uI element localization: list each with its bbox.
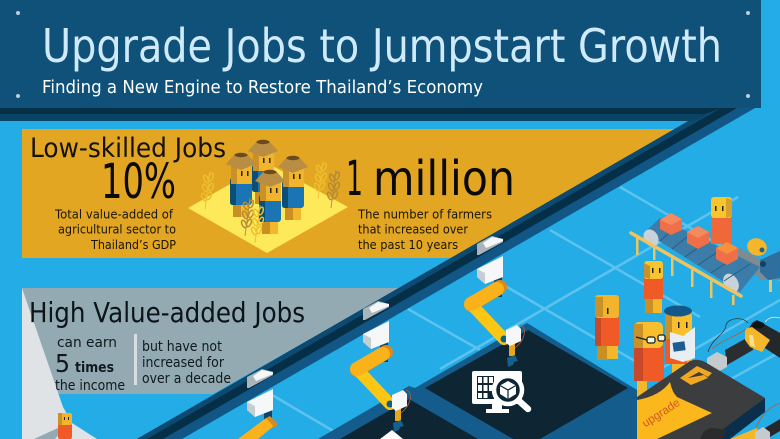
text: wages stagnant: over a decade <box>142 371 231 387</box>
robot arm 3 <box>238 369 278 439</box>
conveyor motor <box>738 236 780 292</box>
text: farmers increase: that increased over <box>358 222 469 236</box>
text: farmers increase: The number of farmers <box>357 206 492 222</box>
person: behind conveyor <box>644 261 663 313</box>
subtitle: Finding a New Engine to Restore Thailand’s Economy <box>42 77 483 98</box>
farm field <box>188 163 348 253</box>
heading: high value-added jobs: High Value-added Jobs <box>29 296 305 329</box>
text: wages stagnant: increased for <box>142 355 224 371</box>
text: earn five times: times <box>75 360 114 376</box>
robot arm: right lower <box>700 403 780 439</box>
stat: 1 million: million <box>373 151 515 207</box>
person: beret reader <box>664 306 695 373</box>
conveyor belt <box>631 197 760 305</box>
stat: 1 million: 1 <box>346 151 363 207</box>
text: agricultural share <box>54 206 176 252</box>
robot arm: right upper <box>707 317 780 373</box>
conveyor boxes <box>660 213 738 265</box>
stat: 10%: 10% <box>101 154 176 210</box>
header banner <box>0 0 761 121</box>
person: glasses worker <box>634 322 665 398</box>
beret <box>664 306 692 316</box>
text: agricultural share: Total value-added of <box>54 206 174 222</box>
diagonal overhead rail <box>137 108 755 439</box>
panel: high value-added jobs <box>22 288 400 439</box>
text: agricultural share: Thailand’s GDP <box>90 237 176 252</box>
text: farmers increase: the past 10 years <box>358 237 458 252</box>
machine yellow plate <box>637 382 712 439</box>
icon: workstation icon top <box>380 430 403 439</box>
floor light beam <box>22 288 97 439</box>
person: small worker <box>58 413 72 439</box>
header rivets <box>16 11 750 98</box>
text: agricultural share: agricultural sector to <box>58 222 176 236</box>
robot arm 2 <box>357 301 410 432</box>
icon: monitor with magnifying glass <box>472 371 528 413</box>
farmers <box>226 140 308 234</box>
text: earn five times <box>55 335 125 394</box>
text: earn five times: can earn <box>57 335 117 351</box>
text: earn five times: 5 <box>55 349 70 378</box>
person: standing worker <box>595 295 619 360</box>
heading: low-skilled jobs: Low-skilled Jobs <box>30 133 226 164</box>
robot arm 1 <box>471 236 524 367</box>
wheat front <box>240 198 265 243</box>
glasses <box>636 335 665 343</box>
open book <box>670 327 695 362</box>
upgrade machine <box>637 360 765 439</box>
panel: low-skilled jobs <box>22 129 676 258</box>
machine label: upgrade <box>640 397 682 430</box>
machine gripper <box>680 366 712 385</box>
text: farmers increase <box>357 206 492 252</box>
conveyor legs <box>636 235 734 305</box>
person: conveyor operator <box>711 197 732 244</box>
platform: lower-left workstation <box>318 323 637 439</box>
text: wages stagnant: but have not <box>142 339 222 355</box>
text: wages stagnant <box>142 339 231 387</box>
wheat back <box>200 161 341 209</box>
platform: data workstation <box>425 330 628 439</box>
text: earn five times: the income <box>55 378 125 394</box>
